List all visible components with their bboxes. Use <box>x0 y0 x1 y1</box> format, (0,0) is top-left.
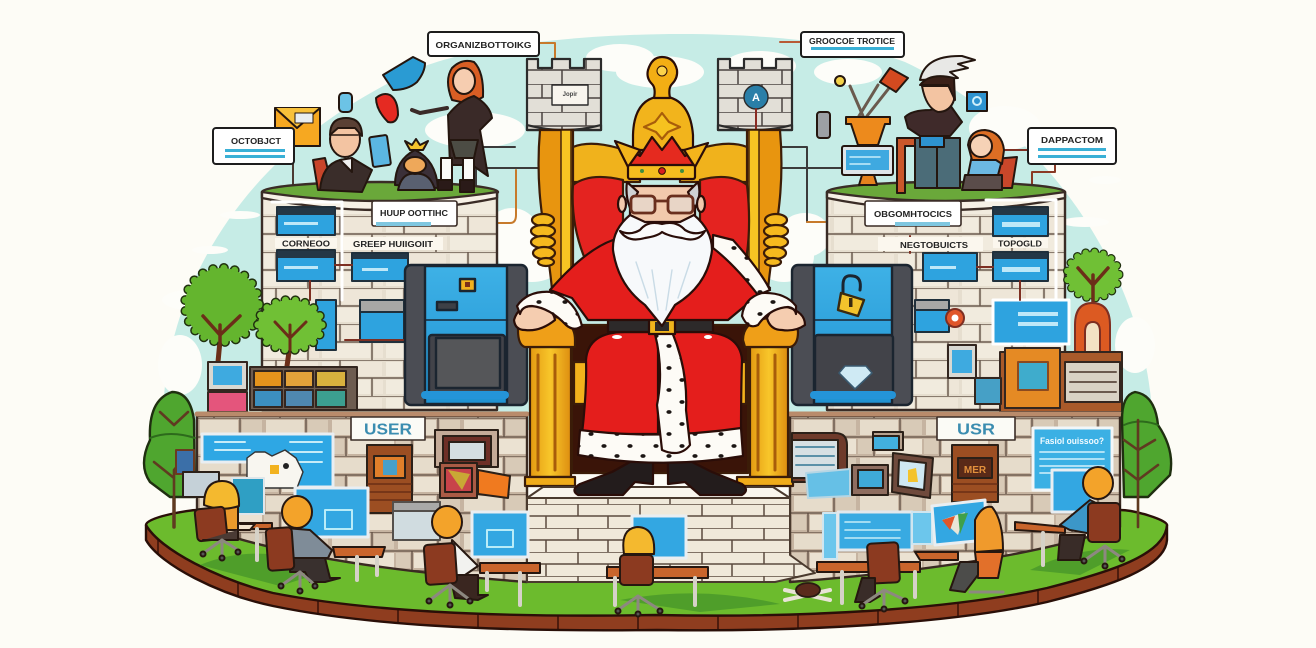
connector lines <box>293 42 1055 223</box>
label: topology <box>993 238 1048 248</box>
label: groups: GROOCOE TROTICE <box>809 37 896 46</box>
middle shelf equipment: left <box>197 362 527 414</box>
seated woman <box>962 130 1017 190</box>
left pillar <box>530 347 571 477</box>
woman standing <box>412 61 492 192</box>
right rooftop characters <box>817 56 1017 193</box>
lower wall: left <box>197 416 527 582</box>
worker 4: centre <box>607 516 708 616</box>
left tower screens <box>272 202 408 350</box>
big question display: Fasiol ouissoo? <box>1040 436 1104 446</box>
label: object <box>213 128 294 164</box>
door <box>952 445 998 502</box>
red cushions <box>573 177 623 270</box>
worker 3 <box>424 506 540 608</box>
label: group highlight <box>343 237 443 250</box>
worker 7 <box>1015 467 1124 568</box>
label: group metrics right <box>865 201 961 226</box>
label: connection: CORNEOO <box>282 240 330 248</box>
label: topology: TOPOGLD <box>998 240 1042 248</box>
worker 2 <box>266 488 385 594</box>
alcove and pictures <box>435 430 498 467</box>
server: right <box>792 265 912 405</box>
lower left wall furniture <box>176 430 510 540</box>
icon: diamond <box>839 366 872 389</box>
user sign: left: USER <box>364 422 412 438</box>
door <box>367 445 412 513</box>
icon: shield tag <box>383 57 425 90</box>
icon: crossed bones <box>785 583 830 600</box>
big display <box>202 434 333 487</box>
belt <box>608 318 713 332</box>
sky dome with clouds <box>158 34 1155 430</box>
top rail <box>573 144 747 182</box>
icon: potted tools <box>835 68 908 145</box>
man with feather hair <box>905 56 987 136</box>
user sign: left <box>351 417 425 440</box>
label: group highlight: GREEP HUIIGOIIT <box>353 240 433 249</box>
tree: mid right <box>1067 252 1119 355</box>
upper tower: right <box>827 182 1065 410</box>
worker 1 <box>194 481 272 560</box>
label: network objects: NEGTOBUICTS <box>900 241 969 250</box>
worker 6 <box>915 500 1003 592</box>
right pillar <box>750 347 788 477</box>
label: directory <box>1028 128 1116 164</box>
cuffs <box>517 292 582 329</box>
castle tower: left <box>527 59 601 130</box>
gold side knobs <box>531 214 788 266</box>
castle tower: right <box>718 59 792 130</box>
label: directory: DAPPACTOM <box>1041 135 1103 145</box>
throne back posts <box>539 130 573 290</box>
user sign: right <box>937 417 1015 440</box>
castle tower: left: Jopir <box>563 92 578 98</box>
king <box>514 57 805 495</box>
label: network objects <box>878 237 983 251</box>
icon: envelope <box>275 108 320 146</box>
ground disc with brick rim <box>146 510 1167 630</box>
lower wall: right <box>790 416 1120 582</box>
fur centre strip <box>655 332 690 453</box>
middle shelf equipment: right <box>790 345 1122 414</box>
lower right wall furniture: MER <box>964 465 987 476</box>
hands <box>514 306 555 330</box>
label: connection <box>275 238 337 248</box>
fur hem <box>578 428 743 463</box>
right tower screens <box>910 200 1069 344</box>
man in suit <box>313 118 391 192</box>
glasses <box>631 196 693 213</box>
crown <box>633 96 693 150</box>
tree: far left <box>144 392 195 527</box>
monitor <box>842 146 893 185</box>
boots <box>574 462 653 495</box>
desk leg and cabinet <box>897 135 960 193</box>
beard <box>613 215 712 326</box>
throne <box>518 130 798 486</box>
stone pedestal and steps <box>527 487 815 582</box>
gear card <box>247 450 303 488</box>
server: left <box>405 265 527 405</box>
heading label: organization: ORGANIZBOTTOIKG <box>436 40 532 50</box>
icon: padlock <box>838 276 864 316</box>
dark seat recess <box>572 325 748 473</box>
tree: mid left <box>185 268 322 366</box>
label: groups <box>801 32 904 57</box>
icon: hanging lock <box>817 112 830 138</box>
label: group policy left: HUUP OOTTIHC <box>380 209 448 218</box>
crowned mascot <box>395 139 438 190</box>
robe torso <box>550 240 770 320</box>
tree: far right <box>1122 392 1171 527</box>
label: object: OCTOBJCT <box>231 136 282 146</box>
small wall screens <box>176 450 194 474</box>
icon: blue pill <box>339 93 352 112</box>
icon: round badge: A <box>752 92 760 104</box>
user sign: right: USR <box>957 422 996 438</box>
right shoulder fur <box>713 235 770 295</box>
big question display <box>1033 428 1112 490</box>
icon: red glove <box>376 94 398 122</box>
moustache <box>620 223 705 239</box>
gray screen <box>393 502 440 540</box>
left rooftop characters <box>275 57 492 192</box>
label: group metrics right: OBGOMHTOCICS <box>874 210 953 219</box>
head <box>630 186 695 238</box>
lower right wall furniture <box>792 428 1112 502</box>
upper tower: left <box>262 182 498 410</box>
heading label: organization <box>428 32 539 56</box>
worker 5 <box>817 512 932 612</box>
label: group policy left <box>372 201 457 226</box>
legs <box>582 332 658 434</box>
